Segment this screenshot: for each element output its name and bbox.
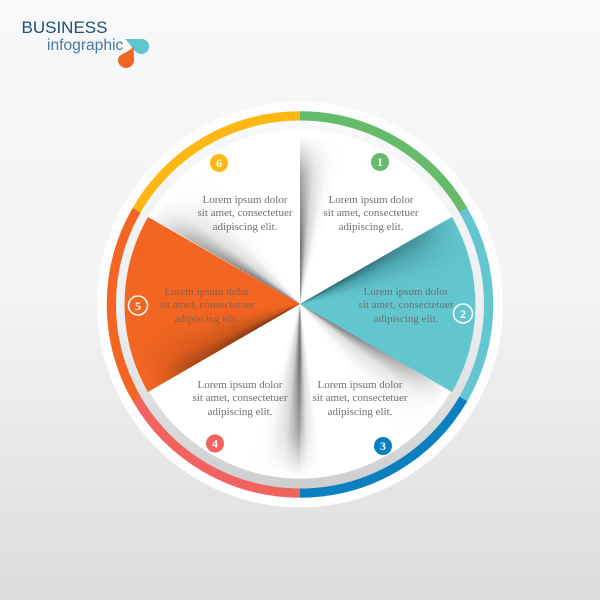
segment 1 text: sit amet, consectetuer (324, 207, 419, 219)
segment 4 shadow (272, 305, 300, 472)
white pie (126, 130, 474, 478)
badge 4 (206, 434, 224, 452)
badge 5 (128, 296, 148, 315)
badge 5: 5 (135, 299, 141, 313)
segment 6 shadow (156, 206, 300, 304)
badge 6 (210, 154, 228, 172)
badge 4: 4 (212, 436, 218, 450)
segment 3 text: sit amet, consectetuer (312, 392, 408, 404)
segment 5 text: Lorem ipsum dolor (165, 286, 250, 298)
segment 1 text: adipiscing elit. (339, 221, 404, 233)
segmented outer ring (112, 116, 488, 493)
logo icon: orange drop (118, 46, 134, 68)
segment 5 text: sit amet, consectetuer (160, 299, 255, 311)
badge 3 (374, 437, 392, 455)
badge 2 (454, 304, 472, 323)
segment 2 text: adipiscing elit. (374, 313, 439, 325)
ring segment 5 (112, 210, 137, 399)
badge 3: 3 (380, 439, 386, 453)
ring segment 3 (300, 399, 463, 493)
segment 6 text: Lorem ipsum dolor (203, 194, 288, 206)
segment 3 text: Lorem ipsum dolor (318, 379, 403, 391)
badge 1 (371, 153, 389, 171)
badge 1: 1 (377, 155, 383, 169)
logo: business infographic (22, 19, 149, 68)
segment 2 text: sit amet, consectetuer (358, 299, 454, 311)
inner gray ring (121, 126, 479, 484)
logo heading: BUSINESS (22, 19, 108, 37)
logo subheading: infographic (47, 37, 123, 54)
segment 5 wedge (125, 217, 300, 392)
segment 5 text: adipiscing elit. (175, 313, 240, 325)
segment 6 text: sit amet, consectetuer (198, 207, 293, 219)
ring segment 1 (300, 116, 463, 210)
badge 6: 6 (216, 156, 222, 170)
segment 3 text: adipiscing elit. (328, 406, 393, 418)
outer white disc (97, 102, 503, 508)
segment 4 text: Lorem ipsum dolor (198, 379, 283, 391)
ring segment 6 (137, 116, 300, 210)
segment 4 text: adipiscing elit. (208, 406, 273, 418)
segment 5 shadow (155, 304, 300, 386)
segment 1 shadow (300, 140, 326, 303)
segment 3 shadows (300, 304, 444, 471)
segment 2 wedge (300, 217, 475, 392)
logo icon: teal drop (125, 39, 149, 54)
segment 4 text: sit amet, consectetuer (192, 392, 288, 404)
segment 2 text: Lorem ipsum dolor (364, 286, 449, 298)
ring segment 4 (137, 399, 300, 493)
segment 2 shadow (300, 218, 450, 304)
segment 6 text: adipiscing elit. (213, 221, 278, 233)
badge 2: 2 (460, 307, 466, 321)
segment 1 text: Lorem ipsum dolor (329, 194, 414, 206)
ring segment 2 (463, 210, 488, 399)
